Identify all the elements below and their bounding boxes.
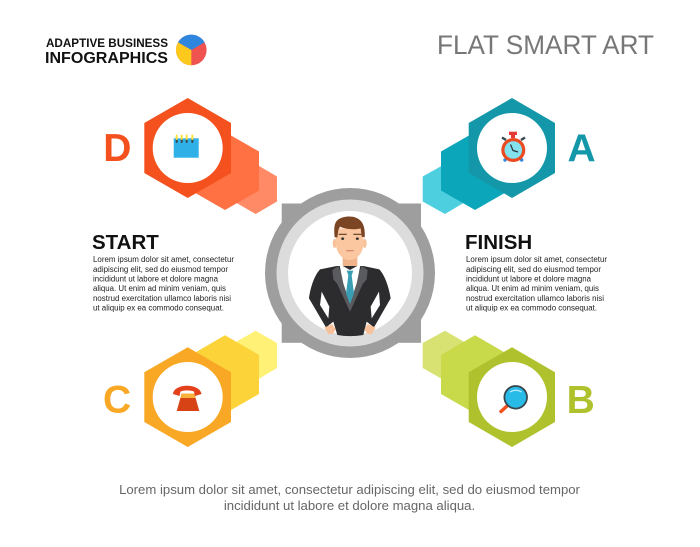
logo heading: INFOGRAPHICS bbox=[45, 50, 168, 67]
text block: finish: incididunt ut labore et dolore magna bbox=[466, 274, 592, 284]
text block: start: Lorem ipsum dolor sit amet, consectetur bbox=[93, 255, 234, 264]
letter C: C bbox=[103, 378, 131, 422]
text block: finish: Lorem ipsum dolor sit amet, consectetur bbox=[466, 255, 607, 264]
text block: finish: ut aliquip ex ea commodo consequat. bbox=[466, 304, 597, 312]
panel: A bbox=[423, 98, 596, 214]
letter D: D bbox=[103, 127, 131, 170]
icon: alarm clock bbox=[501, 132, 525, 162]
panel: D bbox=[103, 98, 277, 214]
text block: start: nostrud exercitation ullamco laboris nisi bbox=[93, 294, 231, 303]
text block: finish: FINISH bbox=[465, 231, 532, 254]
text block: footer: incididunt ut labore et dolore magna aliqua. bbox=[224, 498, 475, 513]
icon: telephone bbox=[173, 386, 202, 411]
text block: start: adipiscing elit, sed do eiusmod tempor bbox=[93, 265, 228, 274]
text block: start bbox=[92, 231, 234, 312]
text block: finish: nostrud exercitation ullamco laboris nisi bbox=[466, 294, 604, 303]
icon: businessman bbox=[309, 217, 391, 336]
text block: start: START bbox=[92, 231, 159, 254]
text block: finish: adipiscing elit, sed do eiusmod tempor bbox=[466, 265, 601, 274]
text block: start: ut aliquip ex ea commodo consequat. bbox=[93, 304, 224, 312]
panel: B bbox=[423, 331, 595, 447]
panel: center portrait bbox=[265, 188, 435, 358]
letter B: B bbox=[567, 379, 595, 422]
text block: start: incididunt ut labore et dolore magna bbox=[93, 274, 219, 284]
icon: logo pie bbox=[176, 35, 207, 65]
text block: finish: aliqua. Ut enim ad minim veniam, quis bbox=[466, 284, 599, 293]
title: FLAT SMART ART bbox=[437, 30, 654, 60]
text block: footer bbox=[119, 482, 581, 513]
text block: footer: Lorem ipsum dolor sit amet, consectetur adipiscing elit, sed do eiusmod tempor bbox=[119, 482, 581, 497]
text block: start: aliqua. Ut enim ad minim veniam, quis bbox=[93, 284, 226, 293]
icon: magnifier bbox=[501, 386, 527, 412]
logo heading: ADAPTIVE BUSINESS bbox=[46, 36, 168, 50]
icon: notepad bbox=[174, 136, 199, 158]
letter A: A bbox=[568, 128, 596, 170]
logo heading bbox=[45, 36, 168, 67]
panel: C bbox=[103, 331, 277, 447]
text block: finish bbox=[465, 231, 607, 312]
